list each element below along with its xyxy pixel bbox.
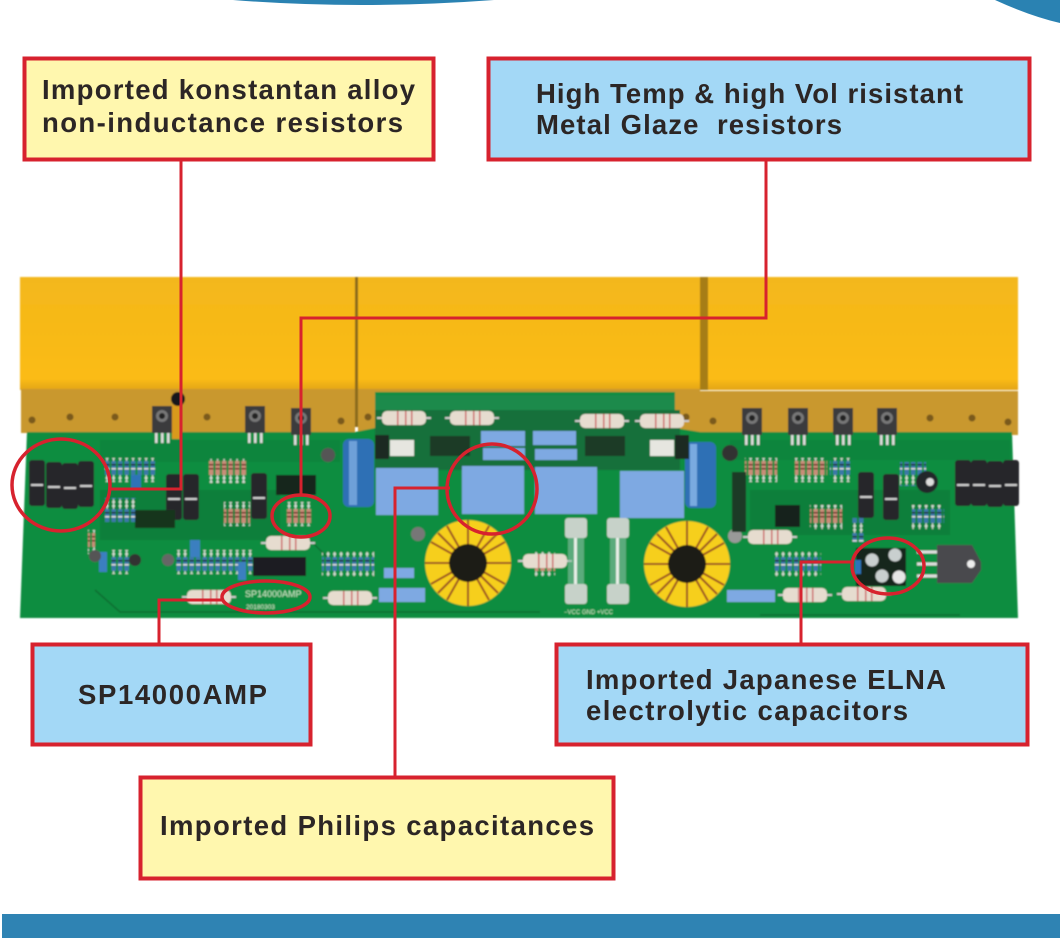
black header connector [253, 557, 306, 576]
small resistor arrays [88, 458, 944, 576]
callout: ELNA capacitors: electrolytic capacitors [586, 695, 908, 726]
callout: metal glaze resistors [488, 58, 1030, 160]
gold brackets [21, 389, 1018, 435]
voltage regulator [917, 545, 981, 583]
callout: ELNA capacitors: Imported Japanese ELNA [586, 664, 946, 695]
green PCB [20, 392, 1018, 618]
callout: Philips capacitances [140, 778, 614, 878]
white wirewound resistors [182, 411, 891, 605]
glass fuses [565, 518, 629, 604]
board silkscreen labels: 20180303 [246, 604, 275, 611]
callout: metal glaze resistors: Metal Glaze resistors [536, 109, 842, 140]
board silkscreen labels: −VCC GND +VCC [564, 610, 614, 616]
top right corner swoosh [995, 0, 1060, 23]
callout: Philips capacitances: Imported Philips capacitances [160, 810, 594, 841]
callout: konstantan resistors: Imported konstantan alloy [42, 74, 416, 105]
power transistors [152, 392, 897, 445]
blue film capacitors [99, 431, 775, 602]
connector lines [110, 161, 852, 776]
callout: konstantan resistors: non-inductance resistors [42, 107, 403, 138]
top banner arc [233, 0, 494, 5]
callout: metal glaze resistors: High Temp & high Vol risistant [536, 78, 963, 109]
gold heat sink fins [20, 277, 1018, 427]
electrolytic capacitors [343, 439, 716, 508]
bottom banner [2, 914, 1060, 938]
amplifier circuit board photo [20, 277, 1019, 618]
callout: SP14000AMP: SP14000AMP [78, 679, 267, 710]
opto and small parts [89, 435, 938, 566]
callout: ELNA capacitors [556, 644, 1028, 744]
toroid inductors [425, 520, 730, 607]
ELNA capacitors [855, 548, 906, 586]
red highlight circles [12, 439, 924, 613]
callout: SP14000AMP [32, 644, 310, 744]
black power resistors [29, 460, 1019, 520]
board silkscreen labels: SP14000AMP [245, 589, 302, 599]
board silkscreen labels [245, 589, 614, 616]
callout: konstantan resistors [24, 58, 434, 160]
